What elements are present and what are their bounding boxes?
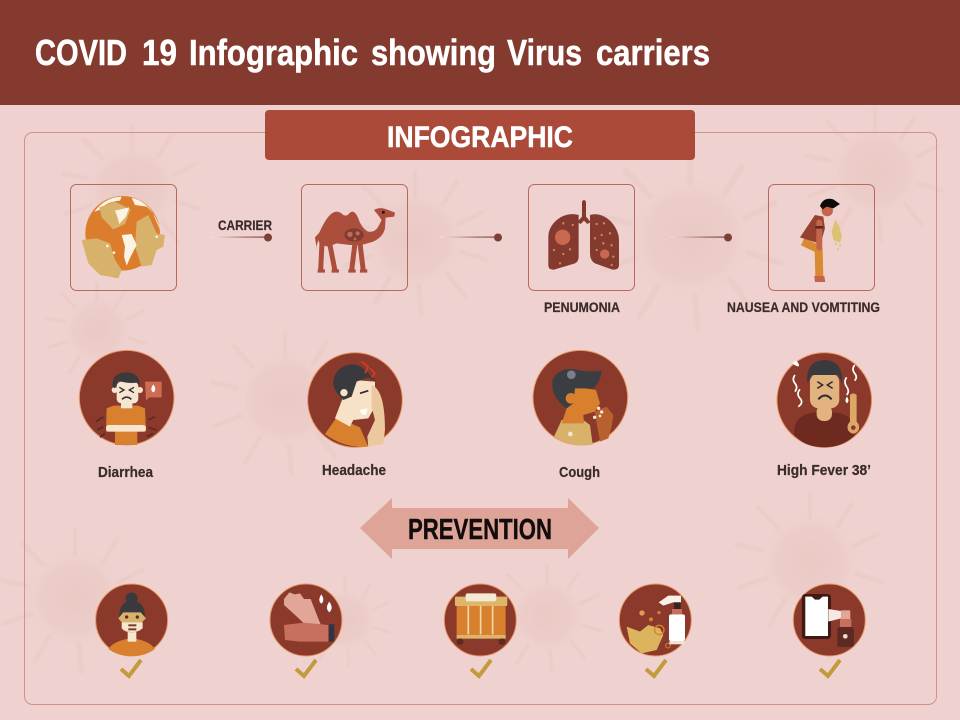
icon: check 5 [820, 660, 840, 676]
icon: lungs [548, 200, 619, 270]
banner: infographic: INFOGRAPHIC [387, 121, 573, 154]
label: pneumonia: PENUMONIA [544, 299, 620, 315]
outer panel frame [24, 132, 936, 704]
connector: carrier [210, 234, 272, 242]
title: 19 [142, 32, 177, 73]
icon: cough [533, 350, 628, 446]
label: carrier: CARRIER [218, 217, 272, 233]
icon: mask wearer [96, 584, 168, 656]
title: COVID [35, 32, 127, 73]
arrow: prevention [360, 498, 599, 559]
title: showing [371, 32, 496, 73]
icon: check 1 [121, 660, 141, 676]
icon: globe [82, 196, 165, 278]
icon: check 2 [296, 660, 316, 676]
icon: hand sanitizer [619, 584, 691, 656]
icon: vomiting person [800, 199, 842, 282]
label: cough: Cough [559, 464, 600, 481]
icon: headache [308, 353, 402, 447]
arrow: prevention: PREVENTION [408, 514, 552, 546]
label: high fever: High Fever 38’ [777, 462, 871, 479]
title: Infographic [189, 32, 358, 73]
icon: gloves [270, 584, 342, 656]
connector: pneumonia to nausea [670, 234, 732, 242]
icon: phone and spray [793, 584, 865, 656]
icon: check 3 [471, 660, 491, 676]
icon: high fever [777, 353, 872, 447]
title [35, 32, 710, 73]
connector: camel to pneumonia [440, 234, 502, 242]
icon: camel [315, 208, 395, 273]
panel: nausea tile [768, 184, 874, 290]
faint virus background pattern [1, 108, 942, 672]
title: Virus [507, 32, 582, 73]
icon: diarrhea [79, 350, 174, 445]
header bar [0, 0, 960, 105]
panel: camel tile [302, 184, 408, 290]
label: headache: Headache [322, 462, 386, 479]
icon: check 4 [646, 660, 666, 676]
banner: infographic [265, 110, 695, 160]
title: carriers [596, 32, 710, 73]
label: diarrhea: Diarrhea [98, 464, 154, 481]
label: nausea and vomiting: NAUSEA AND VOMTITING [727, 299, 880, 315]
icon: waste bin [444, 584, 516, 656]
panel: globe tile [70, 184, 176, 290]
panel: lungs tile [528, 184, 634, 290]
